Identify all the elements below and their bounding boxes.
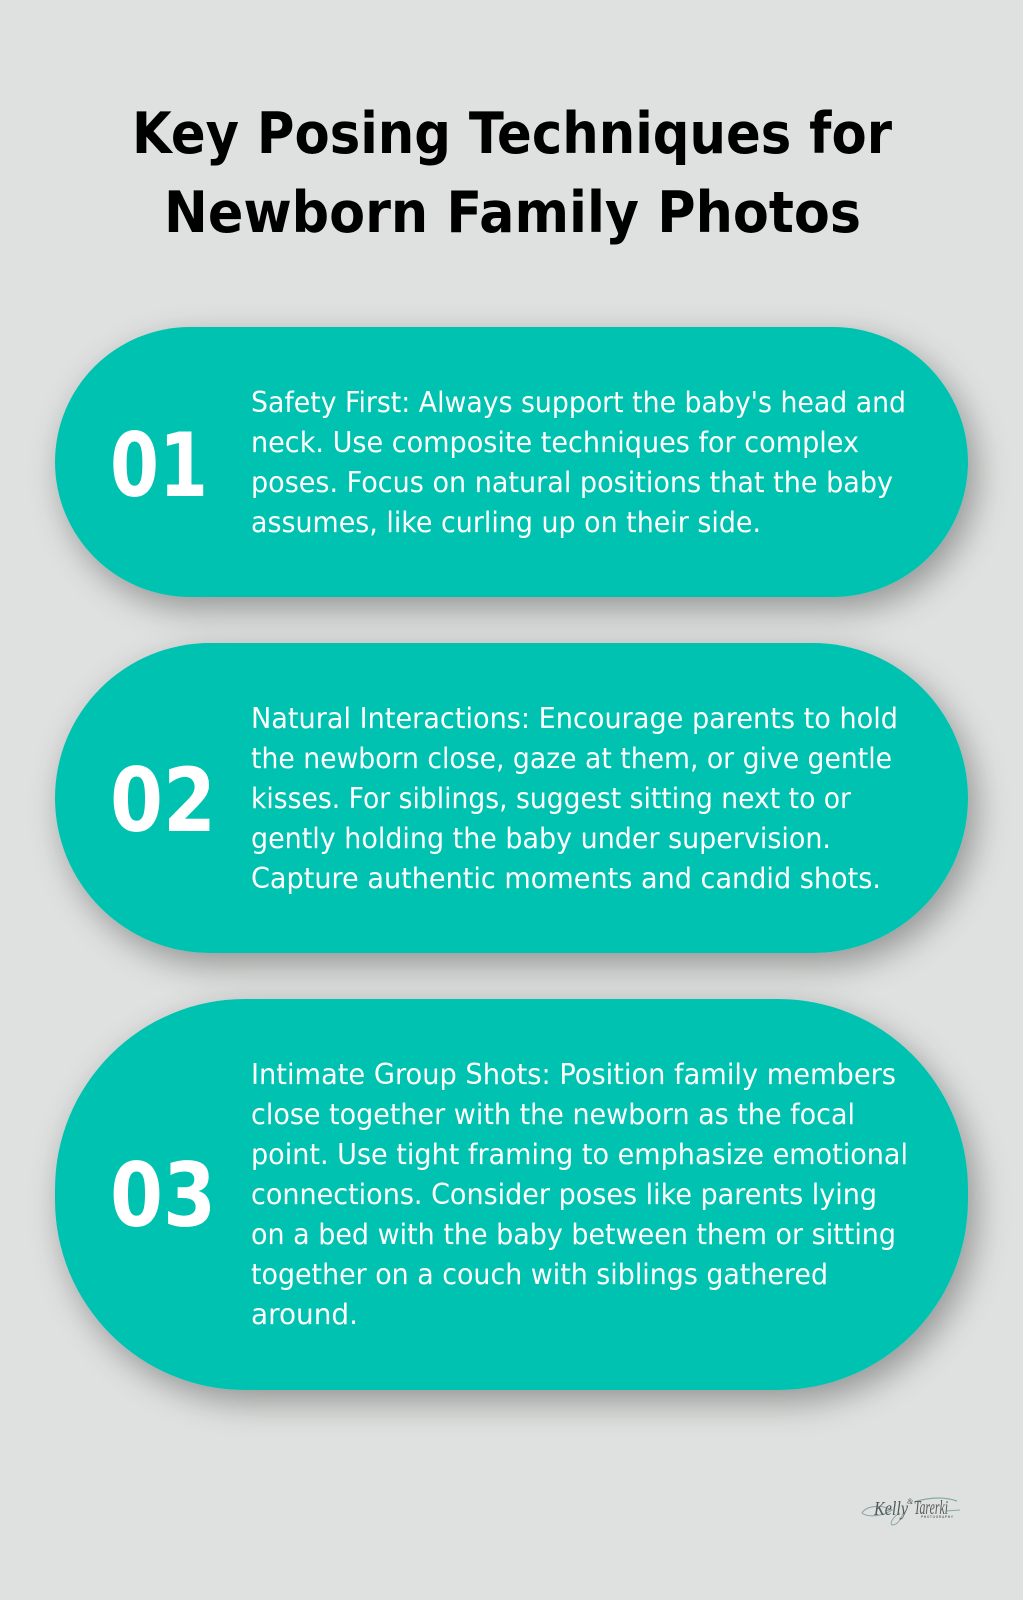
text block 01: poses. Focus on natural positions that the baby (251, 465, 893, 499)
number 03: 03 (110, 1144, 216, 1247)
text block 02 (251, 701, 898, 895)
text block 03: on a bed with the baby between them or sitting (251, 1217, 896, 1251)
text block 03: point. Use tight framing to emphasize emotional (251, 1137, 908, 1171)
text block 02: Capture authentic moments and candid shots. (251, 861, 881, 895)
title: Newborn Family Photos (164, 180, 861, 246)
text block 01: assumes, like curling up on their side. (251, 505, 761, 539)
logo: signature: Tarerki (914, 1497, 948, 1519)
text block 02: gently holding the baby under supervision. (251, 821, 831, 855)
panel: step 02 natural interactions (55, 643, 968, 953)
number 01: 01 (110, 414, 208, 517)
pill background 03 (55, 999, 968, 1390)
text block 01 (251, 385, 906, 539)
logo: signature (862, 1497, 960, 1525)
text block 01: Safety First: Always support the baby's head and (251, 385, 906, 419)
text block 01: neck. Use composite techniques for complex (251, 425, 859, 459)
text block 02: kisses. For siblings, suggest sitting next to or (251, 781, 851, 815)
text block 03: Intimate Group Shots: Position family members (251, 1057, 896, 1091)
logo: signature: PHOTOGRAPHY (921, 1515, 954, 1519)
pill background 01 (55, 327, 968, 597)
text block 03: connections. Consider poses like parents lying (251, 1177, 877, 1211)
panel: step 03 intimate group shots (55, 999, 968, 1390)
pill background 02 (55, 643, 968, 953)
panel: step 01 safety first (55, 327, 968, 597)
text block 03: close together with the newborn as the focal (251, 1097, 855, 1131)
text block 03 (251, 1057, 908, 1331)
title: Key Posing Techniques for (132, 101, 892, 167)
text block 02: the newborn close, gaze at them, or give gentle (251, 741, 892, 775)
title (132, 101, 892, 246)
text block 03: around. (251, 1297, 358, 1331)
text block 03: together on a couch with siblings gathered (251, 1257, 828, 1291)
logo: signature: Kelly (873, 1498, 908, 1520)
text block 02: Natural Interactions: Encourage parents to hold (251, 701, 898, 735)
logo: signature: & (907, 1497, 914, 1506)
number 02: 02 (110, 749, 216, 852)
